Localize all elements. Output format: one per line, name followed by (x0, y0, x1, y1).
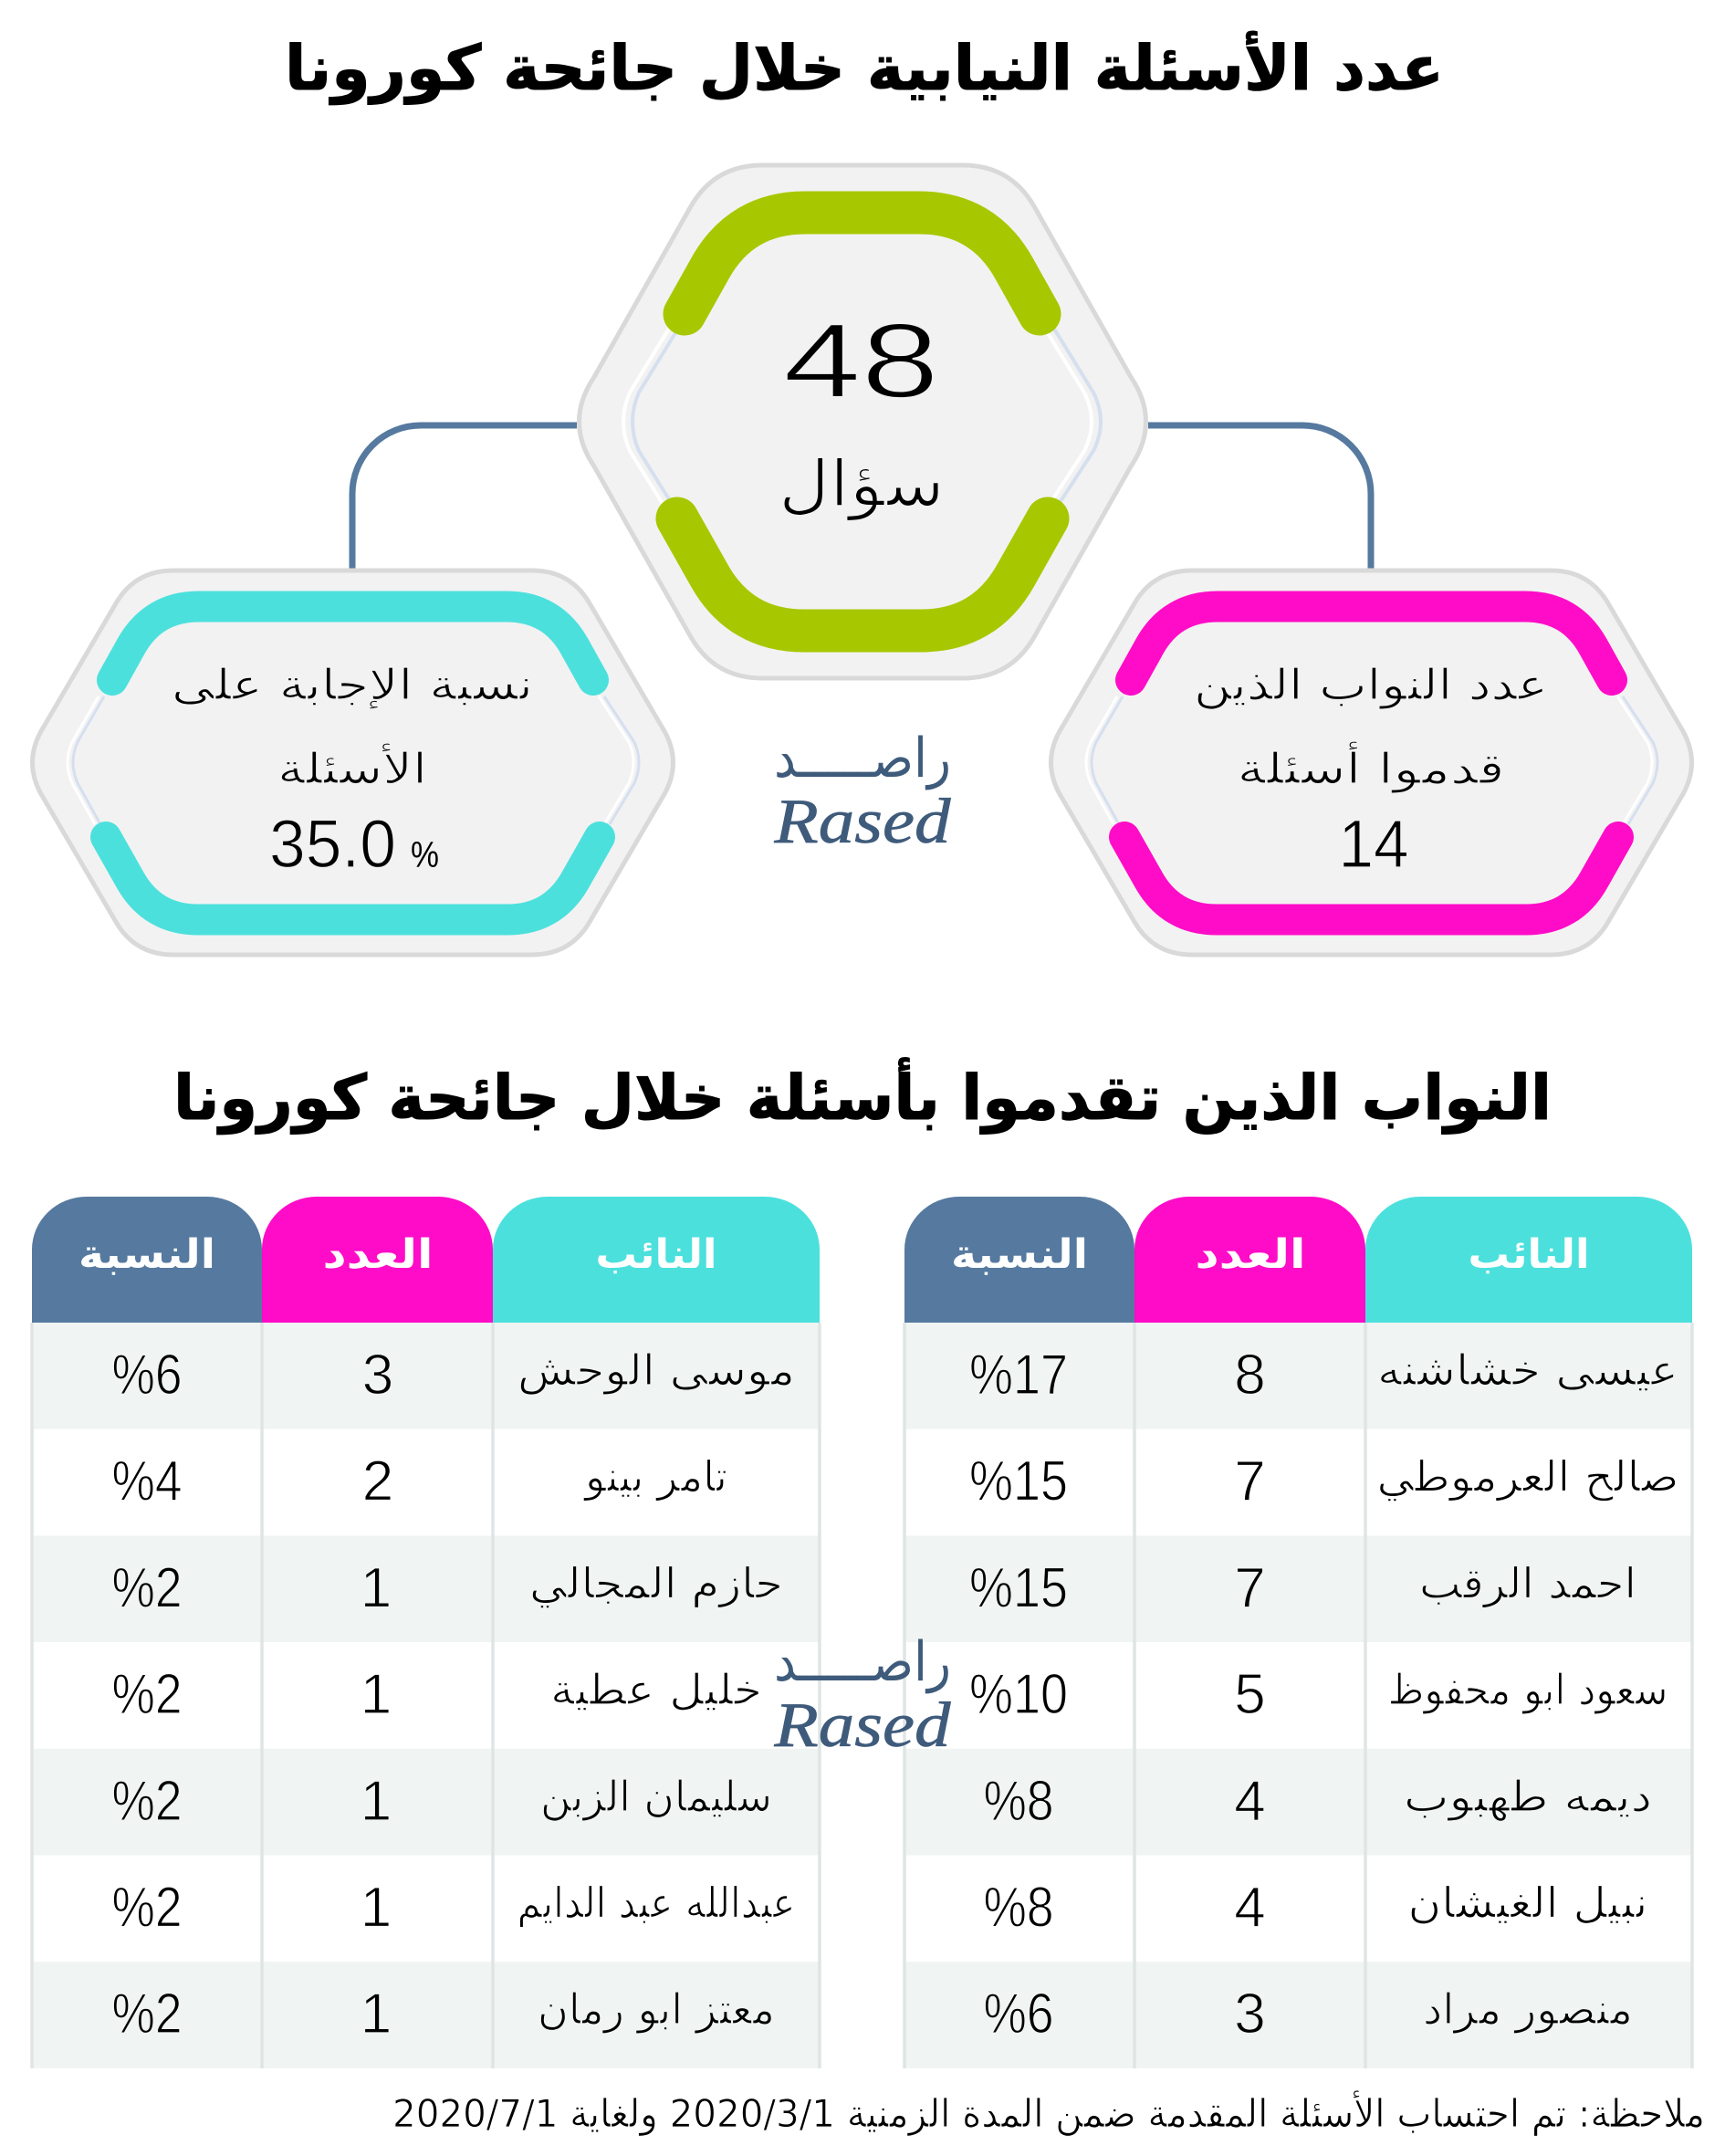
row 6 (111, 1877, 796, 1939)
row 3: %2 (111, 1556, 183, 1619)
row 6: عبدالله عبد الدايم (517, 1879, 796, 1928)
header: percent: النسبة (951, 1231, 1088, 1278)
row 2: %4 (111, 1450, 183, 1513)
row 2: %15 (969, 1450, 1068, 1513)
header: percent (904, 1197, 1134, 1323)
row 5: %2 (111, 1770, 183, 1833)
row 5 (111, 1770, 772, 1833)
row 1: عيسى خشاشنه (1377, 1345, 1678, 1395)
questions label: سؤال (779, 446, 945, 521)
header: count (1134, 1197, 1365, 1323)
panel: answer rate hexagon (33, 570, 674, 955)
row 3: 7 (1234, 1556, 1266, 1619)
row 3: 1 (361, 1556, 392, 1619)
cyan top arc (112, 606, 593, 680)
row 6 (984, 1877, 1648, 1939)
logo: Rased watermark: Rased (773, 1690, 952, 1761)
row 7: %6 (984, 1983, 1053, 2046)
subtitle: النواب الذين تقدموا بأسئلة خلال جائحة كورونا (173, 1057, 1552, 1135)
label line 1: نسبة الإجابة على (172, 660, 533, 709)
row 7: 3 (1234, 1983, 1266, 2046)
row 3 (969, 1556, 1636, 1619)
row 4: %10 (969, 1663, 1068, 1726)
header: percent: النسبة (78, 1231, 215, 1278)
green bottom arc (677, 518, 1048, 631)
row 1: 8 (1234, 1344, 1266, 1407)
hexagon body (579, 165, 1146, 678)
header: deputy (1365, 1197, 1692, 1323)
title: عدد الأسئلة النيابية خلال جائحة كورونا (285, 30, 1444, 105)
panel: left table (32, 1197, 820, 2068)
row 1: %17 (969, 1344, 1068, 1407)
hexagon body (33, 570, 674, 955)
row 7: منصور مراد (1423, 1984, 1633, 2035)
row 4 (111, 1663, 762, 1726)
row 4: %2 (111, 1663, 183, 1726)
header: count: العدد (1196, 1231, 1305, 1278)
row 3: %15 (969, 1556, 1068, 1619)
row 7 (111, 1983, 775, 2046)
row 1 (111, 1344, 795, 1407)
row 6: نبيل الغيشان (1407, 1879, 1648, 1928)
table stripes (32, 1323, 820, 2068)
row 3: احمد الرقب (1419, 1558, 1636, 1608)
hexagon body (1051, 570, 1692, 955)
connector: left (352, 425, 577, 570)
row 6: 4 (1234, 1877, 1266, 1939)
row 2 (111, 1450, 727, 1513)
row 2: 2 (362, 1450, 393, 1513)
row 4: سعود ابو محفوظ (1387, 1665, 1668, 1715)
connector: right (1148, 425, 1371, 570)
row 5: سليمان الزبن (540, 1772, 772, 1822)
label line 1: عدد النواب الذين (1194, 660, 1548, 710)
row 6: %8 (984, 1877, 1053, 1939)
percent sign: % (411, 835, 439, 875)
row 7: %2 (111, 1983, 183, 2046)
row 2: تامر بينو (583, 1452, 727, 1502)
row 2: صالح العرموطي (1376, 1452, 1679, 1502)
panel: deputies count hexagon (1051, 570, 1692, 955)
row 1: موسى الوحش (518, 1345, 795, 1396)
row 4: 5 (1234, 1663, 1266, 1726)
row 5: ديمه طهبوب (1404, 1772, 1652, 1822)
table stripes (904, 1323, 1692, 2068)
header: count (262, 1197, 493, 1323)
number of questions: 48 (783, 301, 939, 420)
header: count: العدد (323, 1231, 433, 1278)
header: deputy (493, 1197, 820, 1323)
header: deputy: النائب (1468, 1231, 1590, 1278)
row 5: 4 (1234, 1770, 1266, 1833)
row 3: حازم المجالي (529, 1558, 783, 1608)
green top arc (685, 213, 1040, 314)
row 2 (969, 1450, 1679, 1513)
label line 2: قدموا أسئلة (1238, 741, 1504, 794)
panel: right table (904, 1197, 1692, 2068)
row 7 (984, 1983, 1633, 2046)
row 4 (969, 1663, 1668, 1726)
logo: Rased watermark: راصـــــد (774, 1630, 951, 1694)
footnote: ملاحظة: تم احتساب الأسئلة المقدمة ضمن المدة الزمنية 2020/3/1 ولغاية 2020/7/1 (392, 2089, 1705, 2137)
row 4: خليل عطية (550, 1665, 762, 1714)
row 5: 1 (361, 1770, 392, 1833)
row 7: 1 (361, 1983, 392, 2046)
row 6: %2 (111, 1877, 183, 1939)
header: deputy: النائب (595, 1231, 717, 1278)
logo: Rased upper: Rased (773, 787, 952, 857)
cyan bottom arc (106, 837, 600, 920)
row 7: معتز ابو رمان (538, 1984, 775, 2035)
row 2: 7 (1234, 1450, 1266, 1513)
header: percent (32, 1197, 262, 1323)
row 1: %6 (111, 1344, 183, 1407)
panel: total questions hexagon (579, 165, 1146, 678)
row 1 (969, 1344, 1678, 1407)
row 4: 1 (361, 1663, 392, 1726)
row 6: 1 (361, 1877, 392, 1939)
answer rate value: 35.0 (269, 806, 396, 882)
logo: Rased upper: راصـــــد (774, 727, 951, 790)
row 1: 3 (362, 1344, 393, 1407)
magenta bottom arc (1124, 837, 1618, 920)
row 5: %8 (984, 1770, 1053, 1833)
deputies count value: 14 (1338, 806, 1409, 882)
row 5 (984, 1770, 1652, 1833)
label line 2: الأسئلة (277, 742, 427, 793)
logo: Rased upper (773, 727, 952, 857)
row 3 (111, 1556, 783, 1619)
magenta top arc (1131, 606, 1612, 680)
logo: Rased watermark (773, 1630, 952, 1761)
